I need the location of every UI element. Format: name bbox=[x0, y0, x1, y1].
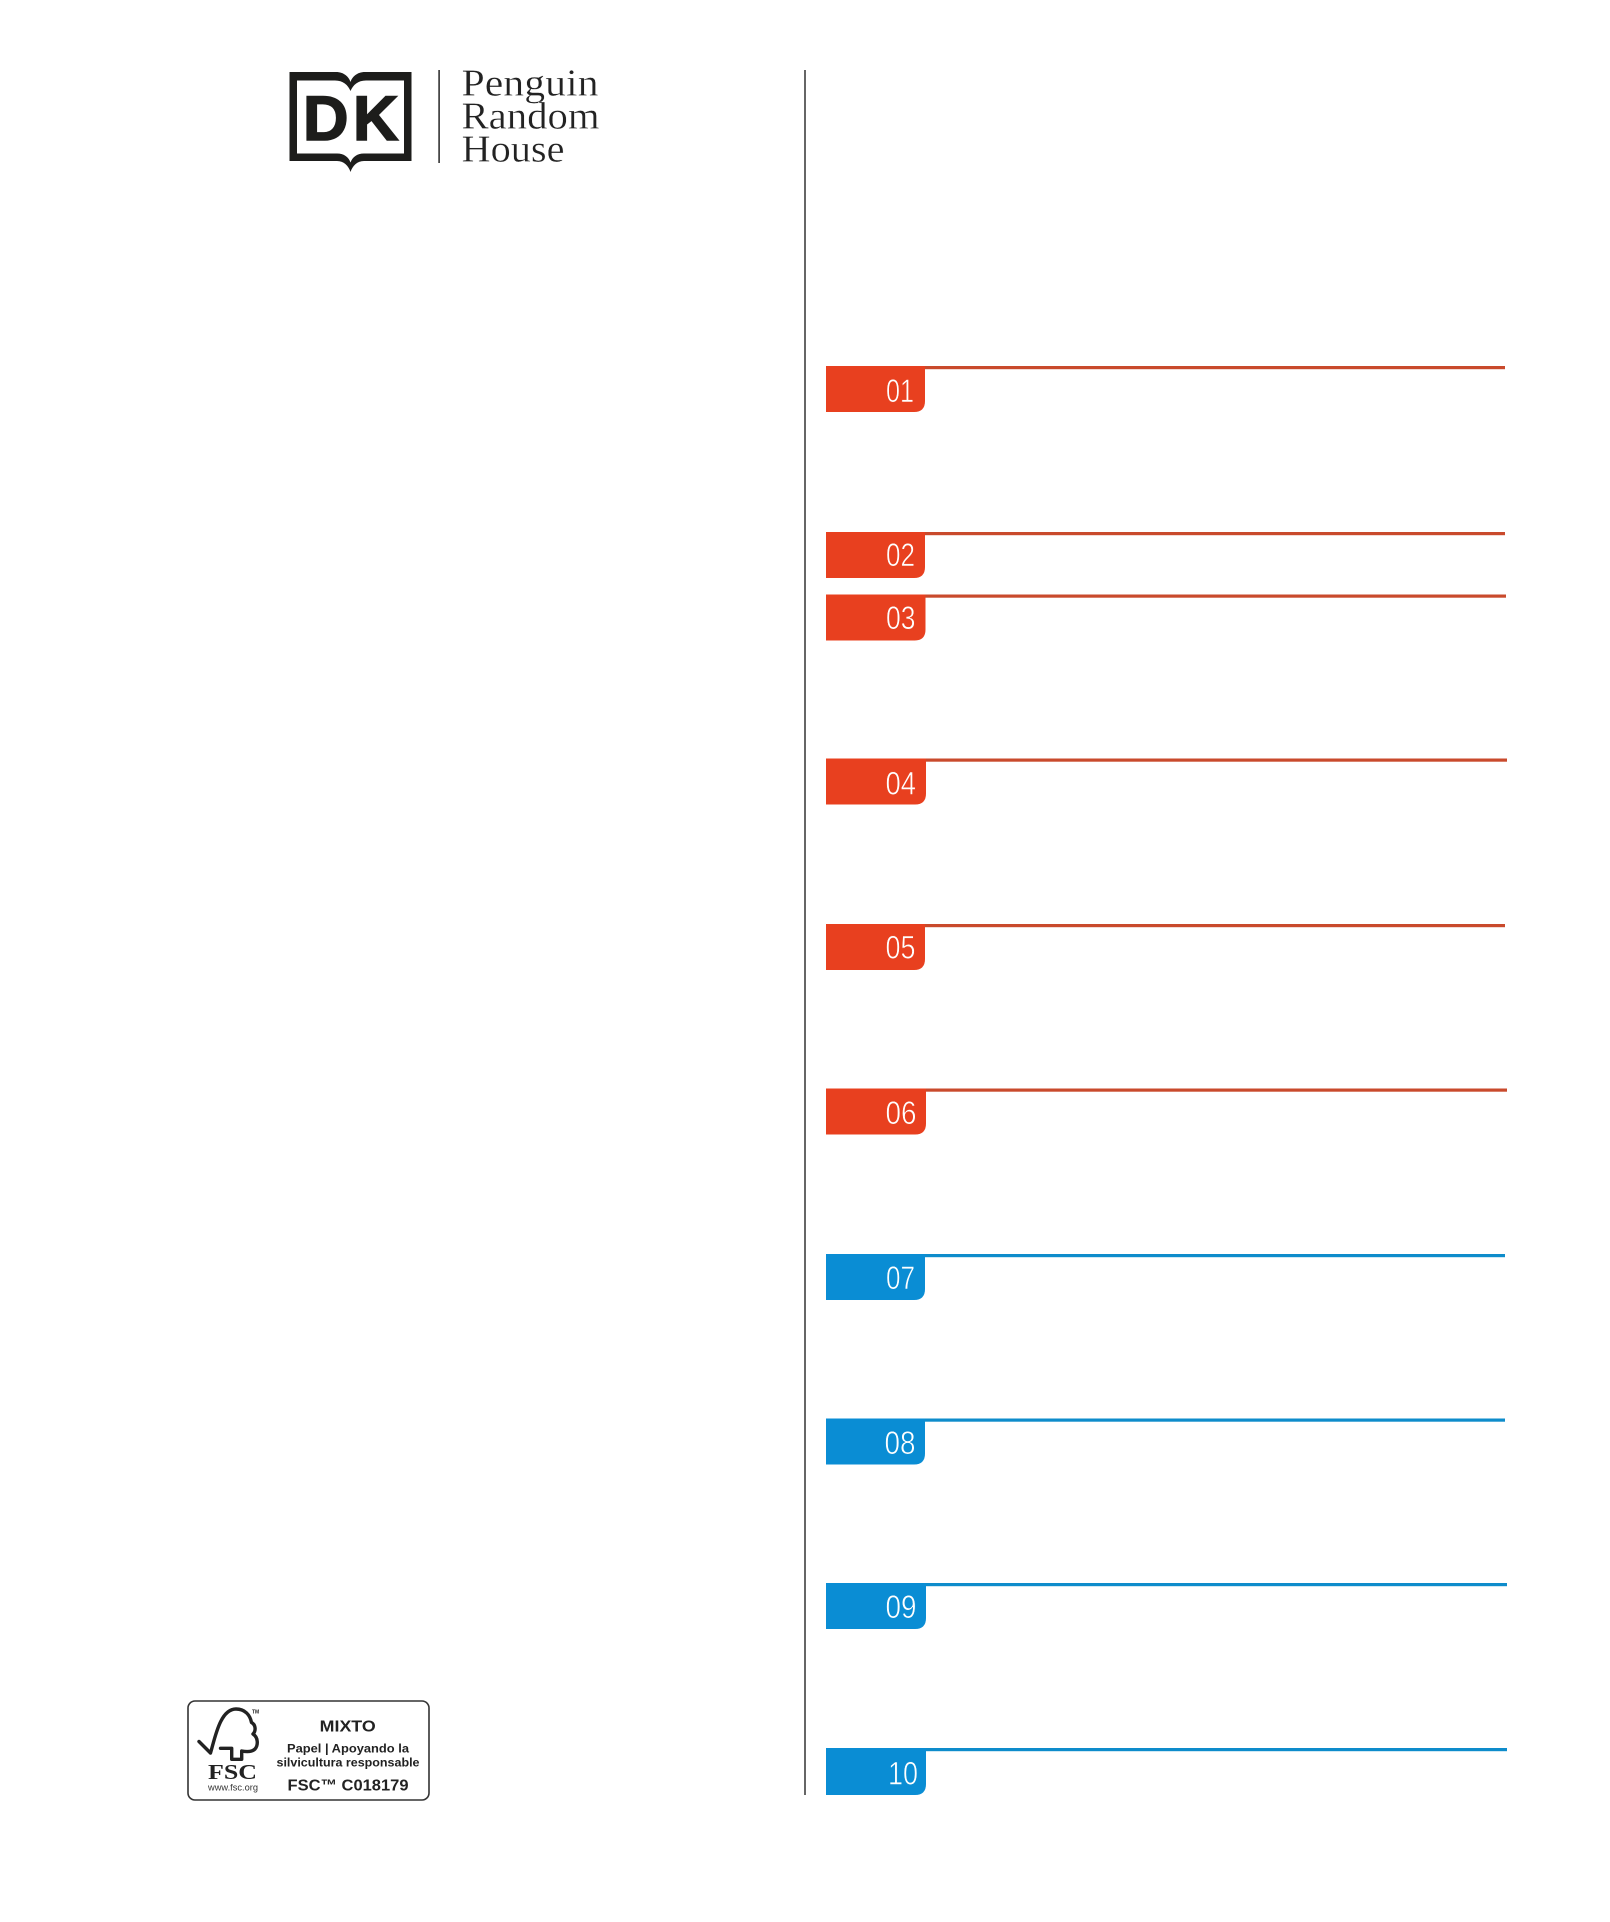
list item 09 bbox=[826, 1583, 1507, 1629]
list item 08 bbox=[826, 1418, 1505, 1464]
wordmark: Penguin bbox=[462, 63, 598, 105]
list item 06: 06 bbox=[886, 1095, 916, 1131]
wordmark: Random bbox=[462, 95, 600, 137]
list item 04 bbox=[826, 758, 1507, 804]
FSC certification label bbox=[188, 1701, 429, 1800]
label text: Papel | Apoyando la bbox=[287, 1742, 409, 1756]
label text: silvicultura responsable bbox=[276, 1756, 420, 1770]
logo divider bbox=[438, 70, 440, 163]
list item 03: 03 bbox=[886, 600, 916, 636]
list item 09: 09 bbox=[886, 1589, 916, 1625]
label text: FSC™ C018179 bbox=[288, 1778, 409, 1795]
list item 02 bbox=[826, 532, 1505, 578]
list item 01: 01 bbox=[886, 373, 914, 409]
icon: FSC checkmark tree bbox=[199, 1709, 259, 1759]
list item 08: 08 bbox=[884, 1425, 916, 1461]
label text: MIXTO bbox=[320, 1719, 376, 1736]
list item 04: 04 bbox=[886, 766, 916, 802]
icon: FSC checkmark tree: TM bbox=[252, 1710, 259, 1716]
list item 03 bbox=[826, 594, 1506, 640]
icon: DK open book frame: DK bbox=[303, 84, 398, 154]
FSC wordmark: FSC bbox=[208, 1760, 257, 1784]
FSC website: www.fsc.org bbox=[207, 1783, 258, 1794]
label text bbox=[276, 1719, 420, 1795]
logo: DK Penguin Random House bbox=[290, 63, 600, 172]
list item 10 bbox=[826, 1748, 1507, 1795]
vertical divider bbox=[804, 70, 806, 1795]
list item 07: 07 bbox=[886, 1260, 915, 1296]
list item 05 bbox=[826, 924, 1505, 970]
list item 10: 10 bbox=[888, 1755, 918, 1791]
wordmark: House bbox=[462, 129, 564, 171]
wordmark bbox=[462, 63, 600, 171]
icon: DK open book frame bbox=[290, 72, 412, 172]
list item 01 bbox=[826, 366, 1505, 412]
list item 06 bbox=[826, 1088, 1507, 1134]
list item 05: 05 bbox=[886, 930, 916, 966]
label border bbox=[188, 1701, 429, 1800]
list item 02: 02 bbox=[886, 537, 915, 573]
list item 07 bbox=[826, 1254, 1505, 1300]
